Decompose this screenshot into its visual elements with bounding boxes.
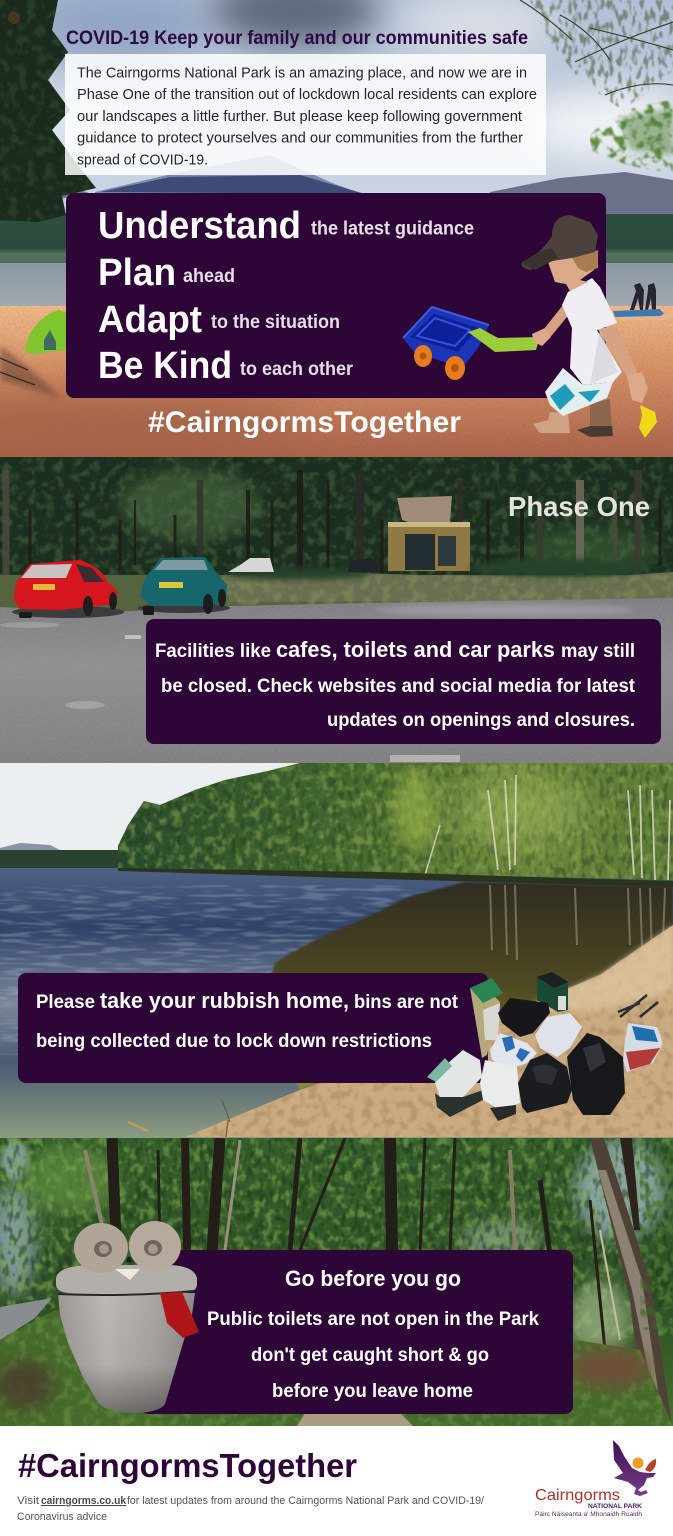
text: Be Kind to each other	[98, 345, 354, 387]
heading: COVID-19 title: COVID-19 Keep your family and our communities safe	[66, 28, 528, 49]
text: Adapt to the situation: to the situation	[211, 312, 340, 333]
logo: Cairngorms National Park eagle	[535, 1440, 656, 1518]
dark parked car	[348, 558, 378, 572]
teal parked car	[138, 557, 230, 615]
text: Understand the latest guidance: the latest guidance	[311, 218, 474, 240]
text: Adapt to the situation	[98, 299, 340, 341]
panel: go before you go callout: Go before you go	[285, 1266, 461, 1291]
text: Understand the latest guidance	[98, 205, 474, 247]
panel: beach photo with messages	[0, 0, 673, 457]
icon: plant pot owl with toilet rolls and red sock	[56, 1221, 199, 1413]
panel: rubbish callout	[18, 973, 488, 1083]
panel: car park photo with facilities message	[0, 457, 673, 763]
red parked car	[12, 560, 124, 618]
panel: go before you go callout: before you leave home	[272, 1381, 473, 1402]
toilet block building	[388, 496, 470, 571]
heading: Phase One: Phase One	[508, 491, 650, 522]
panel: footer	[0, 1426, 673, 1536]
panel: rubbish callout: being collected due to lock down restrictions	[36, 1031, 432, 1052]
text: Be Kind to each other: Be Kind	[98, 345, 232, 387]
photo: loch with forest and sandy shore	[0, 763, 673, 1138]
people and boat on the loch	[613, 283, 664, 317]
hashtag: #CairngormsTogether footer: #CairngormsTogether	[18, 1447, 357, 1484]
logo: Cairngorms National Park eagle: NATIONAL PARK	[588, 1503, 642, 1510]
panel: loch photo with rubbish message	[0, 763, 673, 1138]
text: Be Kind to each other: to each other	[240, 359, 354, 380]
icon: blue toy wagon	[403, 307, 540, 380]
panel: go before you go callout	[140, 1250, 573, 1414]
text block: website note: Visit	[17, 1495, 39, 1507]
text: Plan ahead: Plan	[98, 252, 176, 294]
panel: rubbish callout: Please	[36, 992, 95, 1013]
panel: facilities callout	[146, 619, 661, 744]
text block: introduction on translucent white panel: Phase One of the transition out of lockdown local residents can explore	[77, 87, 537, 103]
text: Plan ahead: ahead	[183, 266, 235, 287]
text block: website note: Coronavirus advice	[17, 1511, 107, 1523]
text block: introduction on translucent white panel: guidance to protect yourselves and our communities from the further	[77, 130, 523, 146]
panel: facilities callout: Facilities like	[155, 641, 271, 662]
text block: introduction on translucent white panel: The Cairngorms National Park is an amazing place, and now we are in	[77, 66, 527, 82]
icon: pile of rubbish bags by bin	[427, 972, 663, 1121]
text block: introduction on translucent white panel: spread of COVID-19.	[77, 152, 208, 168]
text block: website note	[17, 1495, 484, 1523]
panel: facilities callout: may still	[561, 641, 635, 662]
panel: facilities callout: updates on openings and closures.	[327, 710, 635, 731]
panel: facilities callout: be closed. Check websites and social media for latest	[161, 676, 636, 697]
panel: understand, plan, adapt, be kind	[66, 193, 606, 398]
panel: facilities callout: cafes, toilets and car parks	[276, 637, 555, 662]
text block: introduction on translucent white panel	[65, 54, 546, 175]
panel: rubbish callout: bins are not	[354, 992, 459, 1013]
photo: Loch Morlich beach, sky and mountains	[0, 0, 673, 457]
panel: woodland photo with toilets message	[0, 1138, 673, 1426]
logo: Cairngorms National Park eagle: Cairngorms	[535, 1487, 620, 1504]
panel: go before you go callout: Public toilets are not open in the Park	[207, 1309, 539, 1330]
white parked car	[228, 558, 274, 572]
text block: website note: for latest updates from around the Cairngorms National Park and COVID-19/	[127, 1495, 484, 1507]
logo: Cairngorms National Park eagle: Pàirc Nàiseanta a' Mhonaidh Ruaidh	[535, 1511, 642, 1518]
icon: green beach tent	[25, 310, 66, 354]
text: Adapt to the situation: Adapt	[98, 299, 202, 341]
text: Plan ahead	[98, 252, 235, 294]
panel: go before you go callout: don't get caught short & go	[251, 1345, 489, 1366]
photo: woodland track	[0, 1138, 673, 1426]
photo: forest car park	[0, 457, 673, 763]
text block: website note: cairngorms.co.uk	[41, 1495, 127, 1507]
text: Understand the latest guidance: Understand	[98, 205, 301, 247]
icon: child in cap pulling wagon	[522, 215, 657, 438]
hashtag: #CairngormsTogether on sand: #CairngormsTogether	[148, 406, 461, 439]
text block: introduction on translucent white panel: our landscapes a little further. But please keep following government	[77, 109, 522, 125]
panel: rubbish callout: take your rubbish home,	[100, 988, 349, 1013]
